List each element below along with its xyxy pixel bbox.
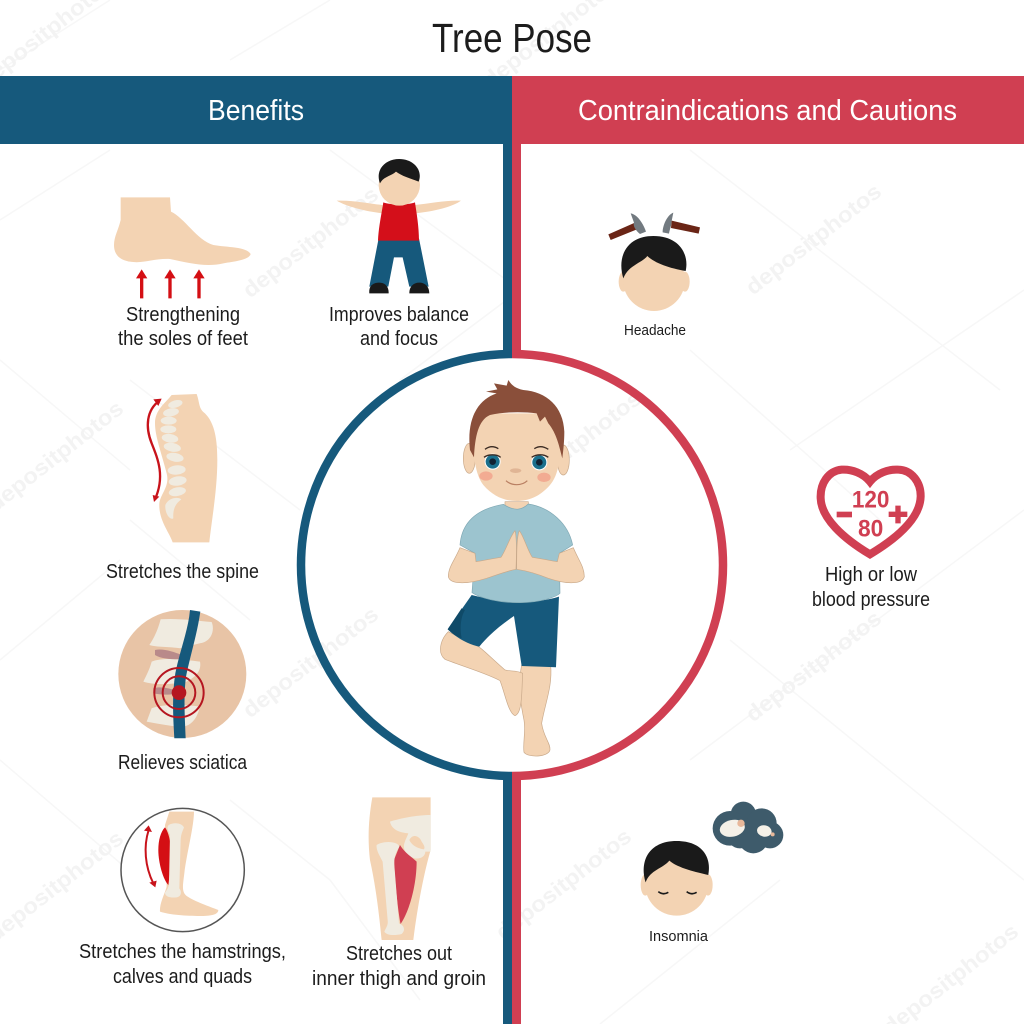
- label: relieves sciatica: Relieves sciatica: [118, 751, 248, 774]
- icon: boy standing with arms out: [337, 159, 461, 293]
- label: stretches the hamstrings, calves and quads: Stretches the hamstrings,: [79, 940, 286, 963]
- icon: headache head with hammers: [608, 213, 700, 311]
- title: Tree Pose: [432, 15, 592, 61]
- label: high or low blood pressure: High or low: [825, 563, 917, 586]
- label: strengthening the soles of feet: Strengthening: [126, 303, 240, 326]
- text: depositphotos: [501, 385, 646, 507]
- label: insomnia: Insomnia: [649, 928, 709, 945]
- label: improves balance and focus: [329, 303, 469, 350]
- label: stretches the spine: Stretches the spine: [106, 560, 259, 583]
- label: stretches out inner thigh and groin: [312, 942, 486, 990]
- label: improves balance and focus: and focus: [360, 327, 438, 350]
- header: contraindications and cautions: Contraindications and Cautions: [578, 95, 957, 127]
- text: depositphotos: [238, 601, 383, 723]
- text: depositphotos: [741, 178, 886, 300]
- icon: sciatica nerve circle: [118, 610, 246, 738]
- icon: blood pressure heart: [821, 470, 921, 554]
- label: strengthening the soles of feet: [118, 303, 248, 350]
- center circle ring: [301, 354, 723, 776]
- icon: blood pressure heart: 120: [852, 486, 889, 513]
- icon: foot with arrows: [114, 197, 251, 298]
- label: stretches the hamstrings, calves and quads: calves and quads: [113, 965, 252, 988]
- text: depositphotos: [741, 605, 886, 727]
- label: strengthening the soles of feet: the soles of feet: [118, 327, 248, 350]
- illustration: boy in tree pose: [440, 380, 584, 756]
- center divider lines: [503, 144, 521, 1024]
- text: depositphotos: [238, 181, 383, 303]
- icon: inner thigh muscle: [369, 797, 431, 940]
- label: improves balance and focus: Improves balance: [329, 303, 469, 326]
- icon: spine torso with arrow: [148, 394, 217, 542]
- label: high or low blood pressure: blood pressure: [812, 588, 930, 611]
- icon: blood pressure heart: 80: [858, 516, 883, 543]
- header: contraindications and cautions: [512, 76, 1024, 144]
- header: benefits: [0, 76, 512, 144]
- text: depositphotos: [491, 823, 636, 945]
- icon: lower leg in circle: [121, 808, 244, 932]
- label: headache: Headache: [624, 322, 686, 339]
- icon: insomnia head with sheep cloud: [641, 802, 783, 916]
- label: stretches the hamstrings, calves and quads: [79, 940, 286, 988]
- label: stretches out inner thigh and groin: Stretches out: [346, 942, 452, 965]
- label: stretches out inner thigh and groin: inner thigh and groin: [312, 967, 486, 990]
- header: benefits: Benefits: [208, 95, 304, 127]
- label: high or low blood pressure: [812, 563, 930, 611]
